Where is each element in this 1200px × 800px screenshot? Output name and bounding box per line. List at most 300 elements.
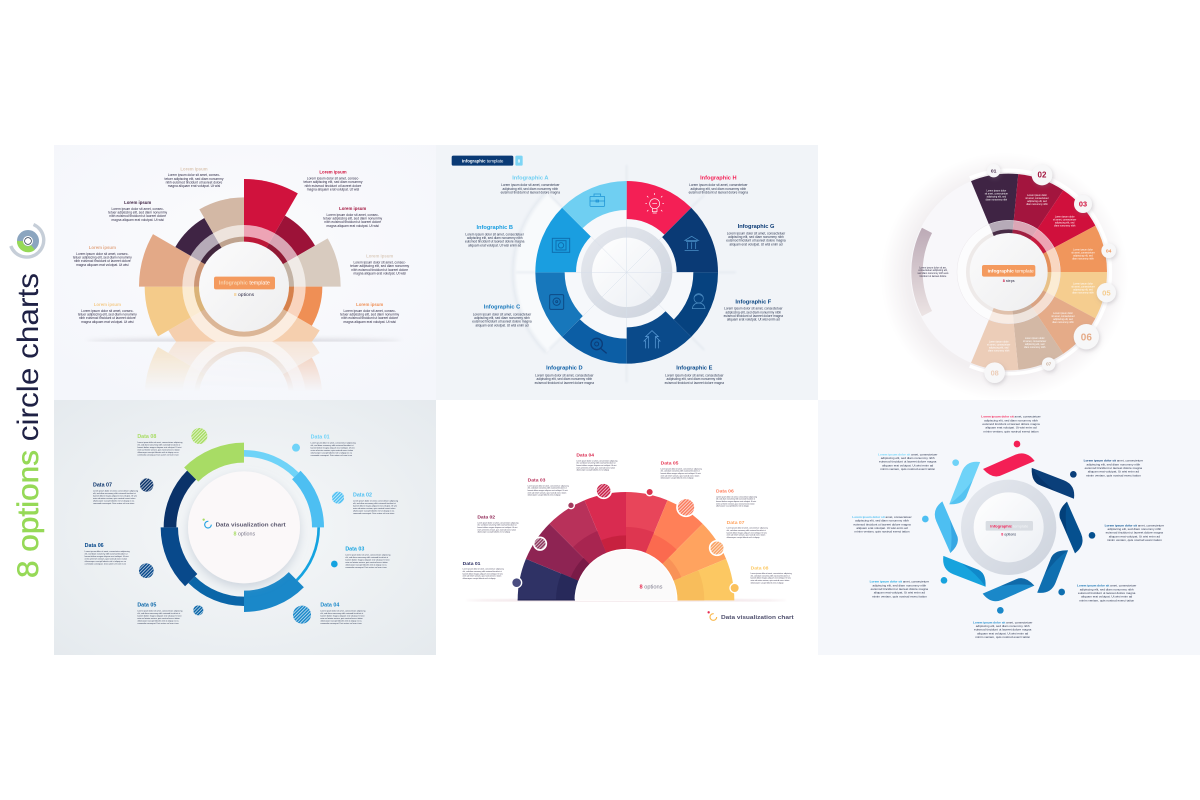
text: Data 07: Data 07 (727, 520, 745, 526)
badge: infographic template: 8 (518, 158, 521, 163)
text: light blue: minim veniam, quis nostrud exerci tation (880, 467, 935, 471)
text: Data 05: elit, sed diam nonummy nibh euismod tincidunt ut (661, 470, 700, 473)
number badges: 04 (1106, 248, 1112, 254)
center label: Infographic template (988, 268, 1034, 274)
text: navy: Lorem ipsum dolor sit amet, consectetuer (1084, 459, 1143, 463)
text: Data 06: laoreet dolore magna aliquam erat volutpat. Ut wisi (716, 500, 757, 503)
text: Infographic B: Lorem ipsum dolor sit amet, consectetuer (465, 232, 525, 236)
white rim (970, 170, 1110, 374)
text: Infographic A: Lorem ipsum dolor sit amet, consectetuer (501, 183, 560, 187)
text: sector 07: adipiscing elit, sed (1025, 343, 1045, 346)
text: Data 02: elit, sed diam nonummy nibh euismod tincidunt ut (353, 502, 396, 505)
left arc band (911, 228, 932, 316)
text: sector 01 (985, 190, 1008, 202)
text: lorem ipsum plum: Lorem ipsum (124, 200, 151, 205)
text: navy: aliquam erat volutpat. Ut wisi enim ad (1088, 470, 1139, 474)
text: Data 06: ullamcorper suscipit lobortis nisl ut aliquip ex ea (85, 560, 127, 563)
text: lorem ipsum tan (165, 166, 224, 188)
badge: infographic template: Infographic template (462, 158, 504, 163)
text: Infographic D: Lorem ipsum dolor sit amet, consectetuer (535, 373, 594, 377)
dark base of first sector (518, 598, 575, 601)
text: Infographic F: adipiscing elit, sed diam nonummy nibh (726, 310, 781, 314)
text: cyan blue: Lorem ipsum dolor sit amet, consectetuer (870, 580, 929, 584)
text: sector 08: diam nonummy nibh (988, 349, 1010, 352)
text: Data 08: ullamcorper suscipit lobortis nisl ut aliquip ex ea (137, 451, 179, 454)
text: Data 08: ullamcorper suscipit lobortis nisl ut aliquip (751, 581, 783, 584)
text: lorem ipsum beige: Lorem ipsum dolor sit amet, consec- (353, 260, 406, 264)
center label: 8 options (1001, 533, 1016, 537)
text: Data 07: commodo consequat. Duis autem vel eum iriure (93, 502, 134, 505)
text: lorem ipsum salmon: Lorem ipsum (89, 245, 116, 250)
text: light blue: aliquam erat volutpat. Ut wisi enim ad (882, 463, 934, 467)
icon: circle chart logo (11, 224, 44, 257)
text: Data 06 (85, 543, 130, 565)
text: Data 06: ullamcorper suscipit lobortis nisl ut aliquip (716, 505, 749, 508)
reflection of chart (146, 342, 322, 386)
text: Infographic B: aliquam erat volutpat. Ut wisi enim ad (468, 243, 521, 247)
text: Data 01 (463, 561, 504, 580)
text: sector 05: diam nonummy nibh (1072, 292, 1094, 295)
text: sector 05: Lorem ipsum dolor (1073, 283, 1093, 286)
text: bottom blue: aliquam erat volutpat. Ut wisi enim ad (977, 631, 1029, 635)
text: lorem ipsum crimson (323, 206, 382, 228)
text: sector 05: adipiscing elit, sed (1073, 289, 1093, 292)
text: left note: tincidunt ut laoreet dolore (920, 275, 947, 278)
center label: 8 options (234, 532, 255, 538)
text: lorem ipsum yellow (78, 302, 137, 324)
text: Infographic F: Infographic F (735, 299, 772, 305)
text: Data 02: commodo consequat. Duis autem vel eum iriure (353, 512, 394, 515)
text: mid blue: minim veniam, quis nostrud exerci tation (1079, 598, 1134, 602)
text: sky blue: adipiscing elit, sed diam nonummy nibh (855, 519, 909, 523)
number badges: 03 (1079, 200, 1087, 209)
text: Data 04: ullamcorper suscipit lobortis nisl ut aliquip ex ea (320, 620, 362, 623)
text: cyan blue: adipiscing elit, sed diam nonummy nibh (872, 583, 926, 587)
8 options label: 8 options (640, 585, 663, 591)
text: Data 01: enim ad minim veniam, quis nostrud exerci tation (311, 449, 353, 452)
halo circle (881, 153, 1129, 401)
text: Data 08: elit, sed diam nonummy nibh euismod tincidunt ut (751, 574, 790, 577)
icon: lightbulb (645, 193, 664, 213)
icon: arrows (644, 331, 660, 348)
text: Data 01: Lorem ipsum dolor sit amet, consectetuer adipiscing (311, 441, 356, 444)
text: Data 02: ullamcorper suscipit lobortis nisl ut aliquip ex ea (353, 509, 395, 512)
text: Infographic A (501, 176, 560, 195)
text: Data 04: Lorem ipsum dolor sit amet, consectetuer adipiscing (320, 610, 365, 613)
text: Data 08: Data 08 (137, 434, 156, 440)
text: sector 02: adipiscing elit, sed (1027, 200, 1047, 203)
text: mid blue: adipiscing elit, sed diam nonummy nibh (1080, 587, 1134, 591)
text: Infographic C: aliquam erat volutpat. Ut wisi enim ad (476, 323, 529, 327)
text: Data 03: enim ad minim veniam, quis nostrud exerci tation (528, 491, 566, 494)
text: Infographic B: adipiscing elit, sed diam nonummy nibh (467, 236, 523, 240)
text: sector 01: sit amet, consectetuer (985, 193, 1008, 196)
text: Data 06: Data 06 (716, 489, 734, 495)
text: Data 07: Lorem ipsum dolor sit amet, consectetuer adipiscing (93, 489, 138, 492)
text: left note: Lorem ipsum dolor sit am, (919, 266, 947, 269)
petals (935, 453, 1083, 601)
text: Data 03: enim ad minim veniam, quis nostrud exerci tation (345, 561, 388, 564)
text: Data 06: Lorem ipsum dolor sit amet, consectetuer adipiscing (716, 495, 757, 498)
text: Data 08: Data 08 (751, 565, 769, 571)
center label: Data visualization chart (216, 522, 286, 528)
text: lorem ipsum plum: magna aliquam erat volutpat. Ut wisi (111, 218, 164, 222)
text: bottom blue: minim veniam, quis nostrud exerci tation (975, 635, 1030, 639)
text: sector 04: Lorem ipsum dolor (1073, 248, 1093, 251)
text: Data 08 (137, 434, 182, 456)
text: sector 08 (987, 340, 1010, 352)
text: sector 03 (1053, 216, 1076, 228)
text: Data 04: ullamcorper suscipit lobortis nisl ut aliquip (576, 469, 609, 472)
dots (922, 441, 1095, 614)
text: Data 03: Data 03 (345, 547, 364, 553)
text: lorem ipsum tan: nibh euismod tincidunt ut laoreet dolore (166, 180, 223, 184)
text: sector 06: sit amet, consectetuer (1051, 315, 1075, 318)
number badges: 02 (1038, 171, 1047, 180)
text: Infographic B: Infographic B (476, 225, 513, 231)
text: navy (1084, 459, 1143, 477)
text: Data 05: Data 05 (137, 603, 156, 609)
text: bottom blue: adipiscing elit, sed diam nonummy nibh (976, 624, 1030, 628)
text: top red: minim veniam, quis nostrud exerci tation (984, 429, 1039, 433)
text: Data 07: elit, sed diam nonummy nibh euismod tincidunt ut (93, 492, 136, 495)
text: Infographic E (665, 366, 724, 385)
text: sector 03: adipiscing elit, sed (1055, 222, 1075, 225)
text: Data 02: ullamcorper suscipit lobortis nisl ut aliquip (477, 531, 510, 534)
text: Data 05: elit, sed diam nonummy nibh euismod tincidunt ut (137, 612, 181, 615)
badge: infographic template (452, 156, 523, 166)
text: bottom blue (973, 620, 1032, 639)
text: sector 07: diam nonummy nibh (1024, 346, 1046, 349)
text: Data 01: commodo consequat. Duis autem vel eum iriure (311, 454, 352, 457)
text: left note (918, 266, 949, 278)
text: Data 04: enim ad minim veniam, quis nostrud exerci tation (576, 466, 615, 469)
text: top red: Lorem ipsum dolor sit amet, consectetuer (981, 415, 1041, 419)
text: lorem ipsum orange (340, 302, 399, 324)
text: Data 01 (311, 434, 356, 457)
text: sector 01: diam nonummy nibh (986, 199, 1008, 202)
text: Data 04: enim ad minim veniam, quis nostrud exerci tation (320, 617, 363, 620)
icon: bank (685, 236, 699, 250)
text: Data 06: Data 06 (85, 543, 104, 549)
text: sector 01: Lorem ipsum dolor (986, 190, 1006, 193)
text: Data 04: elit, sed diam nonummy nibh euismod tincidunt ut (320, 612, 364, 615)
text: sector 04: diam nonummy nibh (1072, 257, 1094, 260)
text: lorem ipsum red: nibh euismod tincidunt ut laoreet dolore (305, 184, 362, 188)
dots (512, 483, 739, 593)
text: Data 02: enim ad minim veniam, quis nostrud exerci tation (353, 507, 395, 510)
text: lorem ipsum crimson: Lorem ipsum (339, 206, 366, 211)
text: Data 02: enim ad minim veniam, quis nostrud exerci tation (477, 528, 516, 531)
text: Data 02 (353, 492, 398, 515)
text: lorem ipsum yellow: magna aliquam erat volutpat. Ut wisi (81, 320, 134, 324)
icon: banknotes (552, 238, 570, 252)
text: lorem ipsum red: Lorem ipsum dolor sit amet, consec- (307, 176, 359, 180)
text: sector 05: sit amet, consectetuer (1071, 286, 1095, 289)
panel: data visualization ring (54, 400, 436, 655)
text: Data 01: laoreet dolore magna aliquam erat volutpat. Ut wisi (311, 446, 355, 449)
center label: Infographic template (990, 523, 1029, 528)
text: Data 03: elit, sed diam nonummy nibh euismod tincidunt ut (345, 556, 389, 559)
text: sector 07: Lorem ipsum dolor (1025, 337, 1045, 340)
text: Data 08 (751, 565, 792, 584)
text: Infographic E: adipiscing elit, sed diam nonummy nibh (667, 377, 722, 381)
number badges: 08 (991, 368, 999, 377)
text: sector 08: Lorem ipsum dolor (989, 340, 1009, 343)
text: sector 08: sit amet, consectetuer (987, 343, 1010, 346)
text: mid blue (1077, 584, 1136, 602)
text: navy: adipiscing elit, sed diam nonummy nibh (1086, 462, 1140, 466)
text: mid blue: aliquam erat volutpat. Ut wisi enim ad (1081, 595, 1133, 599)
text: Infographic G: Lorem ipsum dolor sit amet, consectetuer (727, 231, 786, 235)
text: mid blue: euismod tincidunt ut laoreet dolore magna (1078, 591, 1136, 595)
text: cyan blue: aliquam erat volutpat. Ut wisi enim ad (874, 591, 925, 595)
text: Infographic F (724, 299, 783, 322)
text: lorem ipsum red: Lorem ipsum (319, 170, 347, 175)
icon: magnifier (591, 338, 607, 353)
text: lorem ipsum plum: Lorem ipsum dolor sit amet, consec- (111, 207, 164, 211)
text: lorem ipsum red (304, 170, 363, 191)
text: Data 02: Lorem ipsum dolor sit amet, consectetuer adipiscing (353, 499, 398, 502)
text: Data 01: elit, sed diam nonummy nibh euismod tincidunt ut (463, 570, 502, 573)
text: Infographic F: aliquam erat volutpat. Ut wisi enim ad (727, 318, 780, 322)
center label: 8 options (234, 292, 255, 298)
text: Infographic G (726, 224, 786, 246)
text: dark blue (1105, 523, 1164, 542)
text: Data 01: laoreet dolore magna aliquam erat volutpat. Ut wisi (463, 572, 503, 575)
text: sector 08: adipiscing elit, sed (989, 346, 1009, 349)
text: Infographic F: Lorem ipsum dolor sit amet, consectetuer (724, 307, 783, 311)
text: lorem ipsum crimson: magna aliquam erat volutpat. Ut wisi (326, 224, 379, 228)
text: Data 08: enim ad minim veniam, quis nostrud exerci tation (137, 448, 180, 451)
center rings and disc (957, 220, 1061, 324)
text: Data 04 (320, 603, 365, 625)
panel: infographic template with reflection (54, 145, 436, 400)
text: lorem ipsum salmon (73, 245, 132, 267)
text: lorem ipsum salmon: Lorem ipsum dolor sit amet, consec- (76, 252, 129, 256)
text: Data 03: Data 03 (528, 478, 546, 484)
panel: 8 steps numbered wheel (895, 162, 1120, 388)
text: Data 06: enim ad minim veniam, quis nostrud exerci tation (85, 557, 127, 560)
text: Data 07: enim ad minim veniam, quis nostrud exerci tation (93, 497, 135, 500)
text: dark blue: euismod tincidunt ut laoreet dolore magna (1106, 531, 1163, 535)
text: Infographic H: euismod tincidunt ut laoreet dolore magna (689, 191, 748, 195)
number badges: 07 (1046, 362, 1052, 367)
text: Infographic E: euismod tincidunt ut laoreet dolore magna (665, 381, 724, 385)
text: sector 04 (1071, 248, 1095, 260)
text: lorem ipsum yellow: nibh euismod tincidunt ut laoreet dolore (79, 316, 136, 320)
text: Data 04: elit, sed diam nonummy nibh euismod tincidunt ut (576, 462, 616, 465)
text: sector 02 (1025, 194, 1049, 206)
text: lorem ipsum tan: Lorem ipsum dolor sit amet, consec- (168, 173, 220, 177)
text: sky blue (852, 515, 912, 534)
text: Data 02: laoreet dolore magna aliquam erat volutpat. Ut wisi (353, 504, 398, 507)
text: Infographic E: Infographic E (676, 366, 713, 372)
text: Data 04 (576, 453, 617, 472)
text: Data 05: Lorem ipsum dolor sit amet, consectetuer adipiscing (661, 467, 702, 470)
text: lorem ipsum beige: magna aliquam erat volutpat. Ut wisi (353, 271, 406, 275)
text: Infographic C: Lorem ipsum dolor sit amet, consectetuer (473, 312, 532, 316)
text: lorem ipsum orange: nibh euismod tincidunt ut laoreet dolore (341, 316, 398, 320)
text: Data 08: commodo consequat. Duis autem vel eum iriure (137, 453, 179, 456)
text: Data 08: elit, sed diam nonummy nibh euismod tincidunt ut (137, 443, 181, 446)
text: navy: minim veniam, quis nostrud exerci tation (1086, 473, 1141, 477)
text: dark blue: aliquam erat volutpat. Ut wisi enim ad (1109, 534, 1160, 538)
ring arcs (169, 453, 319, 601)
text: sector 06: diam nonummy nibh (1052, 321, 1074, 324)
text: lorem ipsum tan: tetuer adipiscing elit, sed diam nonummy (165, 177, 224, 181)
text: Infographic D: Infographic D (546, 366, 583, 372)
text: sector 03: sit amet, consectetuer (1053, 219, 1076, 222)
text: Data 03: ullamcorper suscipit lobortis nisl ut aliquip (528, 494, 560, 497)
text: Infographic A: Infographic A (512, 176, 548, 182)
text: Data 03 (345, 547, 390, 569)
inner semicircle (575, 549, 677, 600)
text: light blue: Lorem ipsum dolor sit amet, consectetuer (878, 452, 937, 456)
hatched dots (139, 428, 344, 624)
sectors (971, 174, 1107, 370)
text: Data 08: laoreet dolore magna aliquam erat volutpat. Ut wisi (137, 446, 182, 449)
text: sector 01: adipiscing elit, sed (987, 196, 1007, 199)
text: sector 06: Lorem ipsum dolor (1053, 312, 1073, 315)
text: Data 01: Lorem ipsum dolor sit amet, consectetuer adipiscing (463, 568, 504, 571)
text: Data 08: enim ad minim veniam, quis nostrud exerci tation (751, 579, 789, 582)
text: Infographic H (689, 176, 748, 195)
text: Infographic H: Lorem ipsum dolor sit amet, consectetuer (689, 183, 748, 187)
text: Data 07: laoreet dolore magna aliquam erat volutpat. Ut wisi (727, 531, 767, 534)
text: lorem ipsum red: magna aliquam erat volutpat. Ut wisi (307, 187, 359, 191)
text: Data 06: laoreet dolore magna aliquam erat volutpat. Ut wisi (85, 555, 129, 558)
text: Infographic G: euismod tincidunt ut laoreet dolore magna (726, 239, 786, 243)
text: Infographic F: euismod tincidunt ut laoreet dolore magna (724, 314, 783, 318)
text: sector 06: adipiscing elit, sed (1053, 318, 1073, 321)
text: Data 05 (137, 603, 182, 625)
text: Data 05: ullamcorper suscipit lobortis nisl ut aliquip ex ea (137, 620, 179, 623)
text: bottom blue: euismod tincidunt ut laoreet dolore magna (974, 628, 1032, 632)
number badges (984, 164, 1116, 383)
text: sector 06 (1051, 312, 1075, 324)
text: sector 04: adipiscing elit, sed (1073, 254, 1093, 257)
text: lorem ipsum crimson: nibh euismod tincidunt ut laoreet dolore (324, 220, 381, 224)
text: Data 07: Data 07 (93, 482, 112, 488)
text: Data 07: laoreet dolore magna aliquam erat volutpat. Ut wisi (93, 494, 138, 497)
text: Infographic D: adipiscing elit, sed diam nonummy nibh (537, 377, 592, 381)
text: Data 06: elit, sed diam nonummy nibh euismod tincidunt ut (716, 498, 756, 501)
text: Data 07: enim ad minim veniam, quis nostrud exerci tation (727, 534, 765, 537)
sectors (535, 181, 718, 364)
text: Data 06: Lorem ipsum dolor sit amet, consectetuer adipiscing (85, 550, 130, 553)
text: Infographic C (472, 305, 532, 327)
text: Data 03 (528, 478, 569, 497)
text: sector 07 (1023, 337, 1046, 349)
text: Data 03: laoreet dolore magna aliquam erat volutpat. Ut wisi (528, 489, 568, 492)
text: Data 01: ullamcorper suscipit lobortis nisl ut aliquip ex ea (311, 451, 353, 454)
text: Data 07: elit, sed diam nonummy nibh euismod tincidunt ut (727, 529, 766, 532)
text: Data 02: Data 02 (353, 492, 372, 498)
text: dark blue: Lorem ipsum dolor sit amet, consectetuer (1105, 523, 1164, 527)
text: lorem ipsum tan: Lorem ipsum (180, 166, 208, 171)
text: dark blue: minim veniam, quis nostrud exerci tation (1107, 538, 1162, 542)
text: Infographic A: adipiscing elit, sed diam nonummy nibh (503, 187, 558, 191)
center label (202, 518, 286, 538)
text: light blue: adipiscing elit, sed diam nonummy nibh (881, 456, 935, 460)
number badges: 01 (991, 168, 997, 174)
text: sector 03: diam nonummy nibh (1054, 225, 1076, 228)
center label (986, 521, 1033, 537)
text: lorem ipsum yellow: Lorem ipsum (94, 302, 121, 307)
text: sector 03: Lorem ipsum dolor (1055, 216, 1075, 219)
text: lorem ipsum beige: nibh euismod tincidunt ut laoreet dolore (351, 268, 408, 272)
text: navy: euismod tincidunt ut laoreet dolore magna (1085, 466, 1142, 470)
inner darker bands (556, 527, 704, 600)
text: Data 05: laoreet dolore magna aliquam erat volutpat. Ut wisi (137, 615, 182, 618)
text: Data 02: Lorem ipsum dolor sit amet, consectetuer adipiscing (477, 521, 518, 524)
text: sky blue: aliquam erat volutpat. Ut wisi enim ad (856, 526, 908, 530)
text: Data 05: laoreet dolore magna aliquam erat volutpat. Ut wisi (661, 472, 701, 475)
text: top red: euismod tincidunt ut laoreet dolore magna (982, 422, 1040, 426)
text: Infographic H: adipiscing elit, sed diam nonummy nibh (691, 187, 746, 191)
text: lorem ipsum beige: Lorem ipsum (366, 254, 393, 259)
text: sector 02: sit amet, consectetuer (1025, 197, 1049, 200)
text: Data 06: commodo consequat. Duis autem vel eum iriure (85, 562, 126, 565)
text: lorem ipsum tan: magna aliquam erat volutpat. Ut wisi (168, 184, 220, 188)
chart: radial sectors (139, 179, 341, 374)
text: cyan blue (870, 580, 929, 598)
panel: semicircle chart (436, 400, 818, 655)
text: Data 05 (661, 461, 702, 480)
text: lorem ipsum plum: nibh euismod tincidunt ut laoreet dolore (109, 214, 166, 218)
text: lorem ipsum beige (350, 254, 409, 275)
text: Data 07 (727, 520, 768, 539)
text: Data 08: Lorem ipsum dolor sit amet, consectetuer adipiscing (751, 572, 792, 575)
text: cyan blue: minim veniam, quis nostrud exerci tation (872, 594, 927, 598)
text: mid blue: Lorem ipsum dolor sit amet, consectetuer (1077, 584, 1136, 588)
text: lorem ipsum plum: tetuer adipiscing elit, sed diam nonummy (108, 210, 167, 214)
text: lorem ipsum orange: magna aliquam erat volutpat. Ut wisi (343, 320, 396, 324)
center rings (961, 480, 1056, 575)
text: Infographic C: Infographic C (484, 305, 520, 311)
text: Data 05: commodo consequat. Duis autem vel eum iriure (137, 622, 179, 625)
text: lorem ipsum red: tetuer adipiscing elit, sed diam nonummy (304, 180, 363, 184)
text: Data 07: ullamcorper suscipit lobortis nisl ut aliquip ex ea (93, 499, 135, 502)
text: sector 02: diam nonummy nibh (1026, 203, 1048, 206)
text: Data 08: Lorem ipsum dolor sit amet, consectetuer adipiscing (137, 441, 182, 444)
text: light blue (878, 452, 937, 471)
number badges: 05 (1102, 288, 1111, 297)
text: top red: adipiscing elit, sed diam nonummy nibh (984, 418, 1038, 422)
text: lorem ipsum plum (108, 200, 167, 222)
center disc (188, 471, 300, 583)
text: Data 05: enim ad minim veniam, quis nostrud exerci tation (137, 617, 180, 620)
text: Data 03: ullamcorper suscipit lobortis nisl ut aliquip ex ea (345, 564, 387, 567)
title: 8 options circle charts (vertical): 8 options circle charts (12, 273, 45, 578)
text: Data 08: laoreet dolore magna aliquam erat volutpat. Ut wisi (751, 577, 791, 580)
text: light blue: euismod tincidunt ut laoreet dolore magna (879, 460, 937, 464)
sectors (518, 492, 734, 600)
text: lorem ipsum yellow: Lorem ipsum dolor sit amet, consec- (81, 309, 134, 313)
text: Data 02 (477, 515, 518, 534)
panel: infographic A-H blue wheel (436, 145, 818, 400)
text: Data 06: elit, sed diam nonummy nibh euismod tincidunt ut (85, 552, 128, 555)
text: lorem ipsum orange: tetuer adipiscing elit, sed diam nonummy (340, 312, 399, 316)
text: Infographic G: aliquam erat volutpat. Ut wisi enim ad (730, 242, 783, 246)
text: top red (981, 415, 1041, 433)
logo and chart title: Data visualization chart (721, 615, 794, 621)
text: sector 07: sit amet, consectetuer (1023, 340, 1046, 343)
text: top red: aliquam erat volutpat. Ut wisi enim ad (985, 426, 1037, 430)
text: lorem ipsum orange: Lorem ipsum dolor sit amet, consec- (343, 309, 396, 313)
text: lorem ipsum yellow: tetuer adipiscing elit, sed diam nonummy (78, 312, 137, 316)
